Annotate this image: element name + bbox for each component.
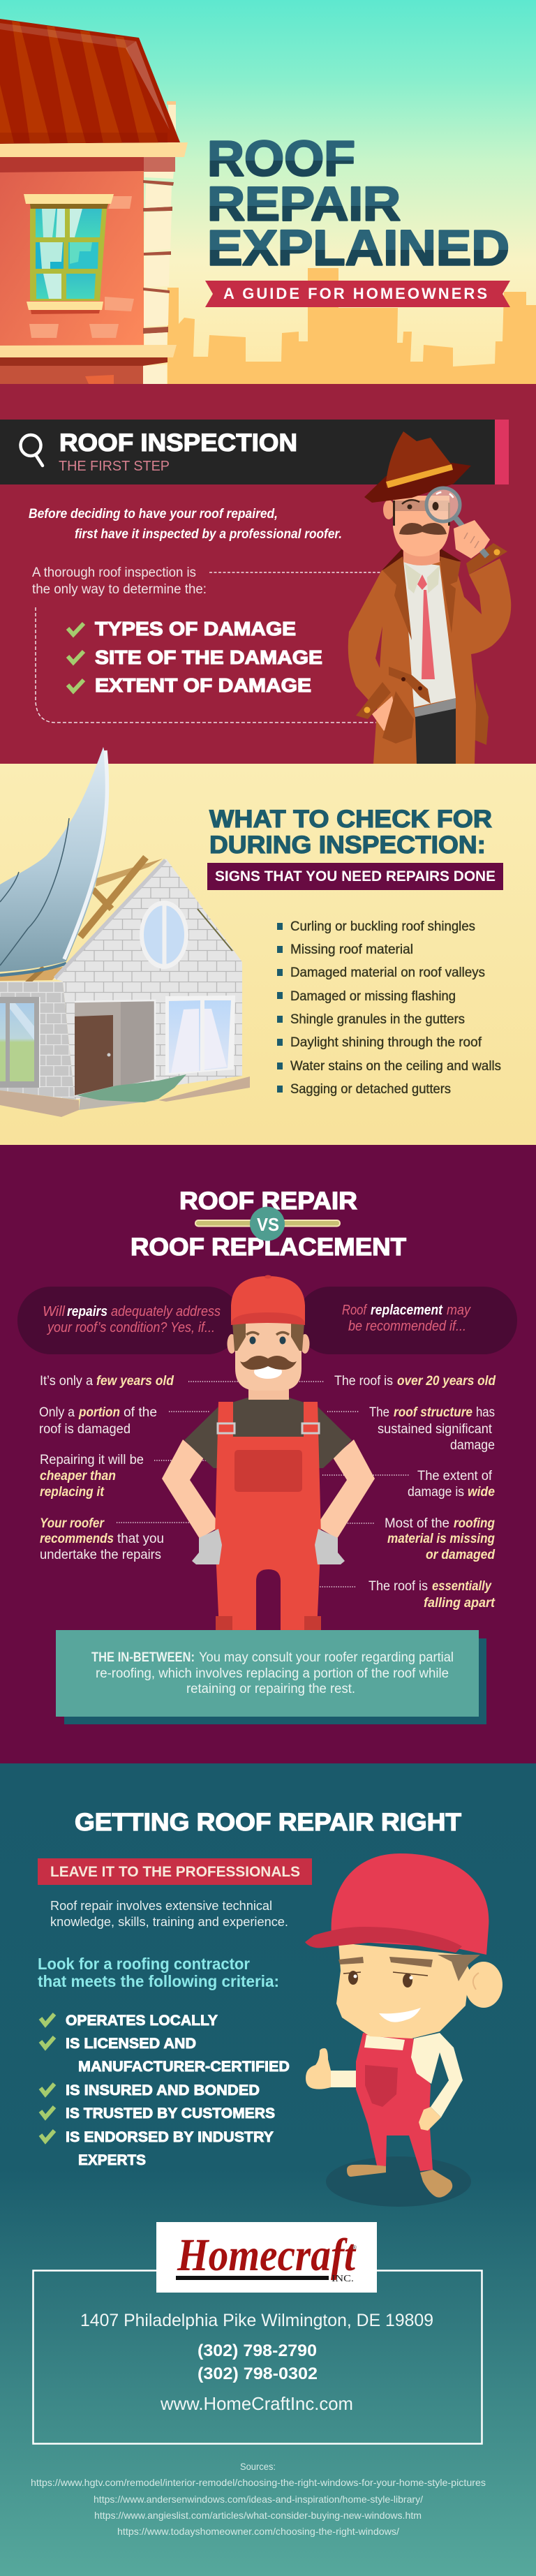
signs list: Curling or buckling roof shingles [290,919,475,934]
callout: the in-between [56,1630,486,1724]
section header bar [0,420,509,484]
inspection description: the only way to determine the: [32,582,207,597]
panel: getting roof repair right [0,1763,536,2576]
callout: the in-between: You may consult your roofer regarding partial [199,1650,454,1665]
panel: roof inspection [0,384,536,764]
criteria lead-in [38,1955,279,1990]
repair conditions: few years old [96,1374,174,1389]
question pill: repair: repairs [67,1304,107,1319]
checklist: TYPES OF DAMAGE [95,618,296,639]
question pill: replacement [297,1287,517,1354]
panel: roof repair vs replacement [0,1145,536,1763]
replacement conditions: The [369,1405,389,1420]
title: REPAIR [207,177,401,230]
checklist: EXTENT OF DAMAGE [95,674,311,696]
section heading: DURING INSPECTION: [209,831,486,859]
criteria checklist: OPERATES LOCALLY [66,2013,218,2029]
repair conditions: undertake the repairs [40,1548,161,1562]
criteria checklist: IS TRUSTED BY CUSTOMERS [66,2105,275,2122]
signs list: Sagging or detached gutters [290,1082,451,1097]
replacement conditions: sustained significant [378,1422,493,1437]
replacement conditions: has [476,1405,495,1420]
replacement conditions: damage is [408,1485,464,1500]
dotted leaders [117,1382,409,1587]
replacement conditions: essentially [432,1579,492,1594]
sources: Sources: [240,2461,276,2472]
repair conditions: Your roofer [40,1516,105,1531]
inspection description: A thorough roof inspection is [32,565,196,580]
sources: https://www.todayshomeowner.com/choosing-the-right-windows/ [117,2526,399,2537]
inspection description [32,565,207,597]
criteria checklist: IS LICENSED AND [66,2036,196,2052]
repair conditions: replacing it [40,1485,105,1500]
repair conditions: It’s only a [40,1374,93,1389]
replacement conditions: roofing [454,1516,495,1531]
repair conditions: roof is damaged [39,1422,131,1437]
replacement conditions: over 20 years old [397,1374,496,1389]
repair conditions: of the [124,1405,157,1420]
checklist [68,618,322,696]
contact box: (302) 798-2790 [198,2341,317,2360]
replacement conditions: falling apart [424,1596,496,1611]
repair conditions [39,1374,174,1562]
panel: what to check [0,747,536,1145]
professionals banner: LEAVE IT TO THE PROFESSIONALS [50,1864,300,1880]
signs list: Shingle granules in the gutters [290,1012,465,1027]
intro text [29,507,342,542]
section heading [209,806,492,859]
sources [31,2461,486,2537]
question pill: repair: your roof’s condition? Yes, if... [46,1320,215,1335]
contact box: (302) 798-0302 [198,2364,318,2383]
replacement conditions: wide [468,1485,495,1500]
replacement conditions: Most of the [385,1516,449,1531]
sources: https://www.hgtv.com/remodel/interior-remodel/choosing-the-right-windows-for-your-home-style-pictures [31,2477,486,2488]
signs list: Daylight shining through the roof [290,1035,482,1050]
repair conditions: Only a [39,1405,75,1420]
subtitle ribbon [205,281,510,307]
replacement conditions: The roof is [334,1374,393,1389]
detective illustration [348,431,511,764]
intro text: Before deciding to have your roof repaired, [29,507,278,521]
contact box [34,2222,482,2443]
question pill: replacement: be recommended if... [348,1319,466,1334]
heading: ROOF REPLACEMENT [131,1234,406,1261]
heading: VS [257,1214,279,1235]
contact box: www.HomeCraftInc.com [160,2393,353,2414]
signs list: Water stains on the ceiling and walls [290,1059,501,1074]
repair conditions: cheaper than [40,1469,116,1483]
section heading: WHAT TO CHECK FOR [209,806,492,833]
icon: magnifier [21,435,43,466]
criteria lead-in: that meets the following criteria: [38,1972,279,1990]
question pill: replacement: Roof [342,1303,368,1318]
signs list: Damaged material on roof valleys [290,965,485,980]
body text: knowledge, skills, training and experience. [50,1915,288,1929]
logo: Homecraft: INC. [332,2274,354,2284]
title [207,131,509,276]
professionals banner [38,1858,312,1885]
criteria checklist: EXPERTS [78,2152,146,2168]
subtitle ribbon: A GUIDE FOR HOMEOWNERS [223,285,487,302]
replacement conditions: damage [450,1438,495,1453]
sub-heading box: SIGNS THAT YOU NEED REPAIRS DONE [215,868,496,884]
signs list [277,919,501,1097]
criteria checklist [40,2013,290,2168]
callout: the in-between: THE IN-BETWEEN: [91,1650,195,1665]
heading [131,1187,406,1261]
heading: ROOF REPAIR [179,1187,357,1215]
window [24,194,114,314]
roofer illustration [162,1275,375,1630]
criteria checklist: IS INSURED AND BONDED [66,2082,260,2098]
sources: https://www.andersenwindows.com/ideas-and-inspiration/home-style-library/ [94,2494,423,2505]
heading: GETTING ROOF REPAIR RIGHT [75,1809,461,1836]
question pill: repair: adequately address [111,1304,221,1319]
title: ROOF [207,131,355,187]
city skyline [168,268,536,384]
criteria lead-in: Look for a roofing contractor [38,1955,250,1973]
replacement conditions: The extent of [417,1469,493,1483]
section header bar: ROOF INSPECTION [59,429,297,457]
logo: Homecraft: ® [352,2244,357,2251]
section header bar: THE FIRST STEP [59,459,170,474]
sources: https://www.angieslist.com/articles/what-consider-buying-new-windows.htm [94,2510,422,2521]
panel: hero header [0,0,536,384]
callout: the in-between: re-roofing, which involves replacing a portion of the roof while [96,1666,449,1681]
checklist: SITE OF THE DAMAGE [95,646,322,668]
replacement conditions: The roof is [368,1579,428,1594]
question pill: repair: Will [43,1304,66,1319]
replacement conditions: roof structure [394,1405,472,1420]
contact box: 1407 Philadelphia Pike Wilmington, DE 19809 [80,2311,433,2330]
question pill: repair [17,1287,241,1354]
signs list: Missing roof material [290,942,413,957]
repair conditions: Repairing it will be [40,1453,144,1467]
body text [50,1899,288,1929]
replacement conditions: material is missing [387,1532,495,1546]
logo: Homecraft [156,2222,377,2293]
replacement conditions: or damaged [426,1548,495,1562]
callout: the in-between: retaining or repairing the rest. [186,1682,355,1696]
intro text: first have it inspected by a professional roofer. [75,527,342,542]
title: EXPLAINED [207,221,509,276]
house illustration [0,747,250,1117]
question pill: replacement: replacement [371,1303,443,1318]
criteria checklist: MANUFACTURER-CERTIFIED [78,2059,290,2075]
signs list: Damaged or missing flashing [290,989,456,1004]
sub-heading box [207,863,503,890]
repair conditions: that you [117,1532,164,1546]
repair conditions: portion [78,1405,120,1420]
logo: Homecraft: Homecraft [177,2230,356,2281]
question pill: replacement: may [447,1303,471,1318]
thumbs-up roofer illustration [305,1853,502,2207]
building illustration [0,19,188,384]
replacement conditions [334,1374,496,1611]
body text: Roof repair involves extensive technical [50,1899,272,1913]
criteria checklist: IS ENDORSED BY INDUSTRY [66,2129,274,2145]
repair conditions: recommends [40,1532,114,1546]
